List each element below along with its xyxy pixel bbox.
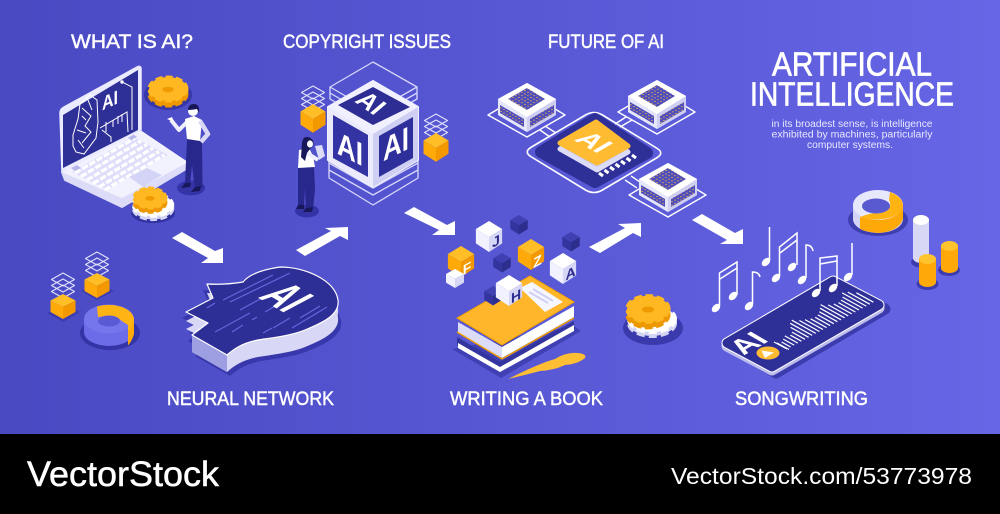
- server: right: [629, 163, 706, 217]
- phone screen: [727, 281, 879, 367]
- heading: songwriting: SONGWRITING: [735, 388, 868, 410]
- heading: writing a book: WRITING A BOOK: [450, 388, 603, 410]
- phone shadow: [731, 285, 885, 373]
- letter cube: F: [448, 246, 474, 279]
- letter cube: F: F: [463, 259, 471, 279]
- phone side: [727, 284, 879, 370]
- note group 1: [710, 262, 739, 314]
- note group 4: [770, 233, 798, 284]
- server: top right: [618, 80, 695, 134]
- footer bar: VectorStock: [27, 455, 220, 494]
- connectors: [540, 117, 643, 188]
- book label: [520, 282, 563, 312]
- music notes: [710, 227, 854, 314]
- description text: exhibited by machines, particularly: [772, 130, 932, 140]
- letter cube: J: J: [492, 232, 500, 252]
- donut chart: right: [848, 190, 908, 236]
- small stack: left: [300, 86, 326, 133]
- screen brain circuit: [73, 81, 132, 154]
- letter cube: H: [496, 275, 522, 308]
- letter cube: A: [550, 253, 576, 285]
- laptop screen: [60, 66, 141, 172]
- description text: in its broadest sense, is intelligence: [772, 119, 933, 130]
- book scene: [446, 215, 585, 379]
- book cover: [457, 276, 574, 345]
- head shadow: [182, 273, 334, 361]
- lavender cylinder: [911, 215, 931, 268]
- title: artificial intelligence: INTELLIGENCE: [750, 76, 954, 112]
- head top face: [186, 267, 338, 355]
- footer bar: VectorStock.com/53773978: [671, 463, 972, 489]
- cube wireframe layers: [329, 62, 418, 205]
- title: artificial intelligence: ARTIFICIAL: [772, 46, 932, 82]
- letter cube: Z: [518, 239, 544, 272]
- letter cube: Z: Z: [533, 252, 542, 272]
- phone: AI: [722, 328, 776, 359]
- chip outer outline: [527, 112, 661, 192]
- note 3: [760, 227, 772, 268]
- letter cube: H: H: [511, 286, 521, 308]
- neural network head: [182, 267, 341, 376]
- lower book: [457, 321, 574, 370]
- heading: what is AI: WHAT IS AI?: [71, 31, 193, 53]
- AI cube: AI: [383, 119, 409, 169]
- arrow: copyright to book: [404, 207, 455, 235]
- AI chip and servers: AI: [568, 127, 619, 157]
- arrow: neural network to copyright: [296, 227, 348, 256]
- book shadow: [452, 326, 581, 378]
- chip body: [560, 128, 628, 170]
- letter cube: A: A: [565, 263, 576, 285]
- description text: [772, 119, 933, 151]
- donut chart: left: [80, 304, 140, 350]
- title: artificial intelligence: [750, 46, 954, 112]
- play button: [756, 346, 780, 360]
- left stacks and donut: [47, 252, 140, 350]
- AI cube: AI: [349, 87, 392, 120]
- description text: computer systems.: [807, 140, 893, 151]
- heading: copyright issues: COPYRIGHT ISSUES: [283, 31, 451, 53]
- quill feather: [508, 353, 585, 379]
- orange cylinder: front: [916, 254, 938, 290]
- chip plate: [541, 119, 647, 182]
- gear: top: [144, 77, 192, 110]
- cylinders: [911, 215, 960, 290]
- heading: neural network: NEURAL NETWORK: [167, 388, 334, 410]
- cube body: [328, 81, 418, 187]
- note 2: [743, 272, 760, 312]
- arrow: book to future: [589, 223, 641, 253]
- woman figure: [295, 137, 325, 218]
- footer bar: [0, 434, 1000, 514]
- man figure: [167, 104, 208, 196]
- neural network head: AI: [248, 276, 325, 318]
- dark cubes: [484, 215, 580, 306]
- laptop: [60, 66, 186, 207]
- AI cube: AI: [337, 124, 363, 174]
- note 5: [796, 245, 813, 286]
- small white cube: [446, 269, 464, 288]
- gear: bottom: [131, 188, 175, 223]
- head streaks: [207, 273, 327, 333]
- cube stack: upper: [81, 252, 114, 300]
- small stack: right: [424, 114, 448, 162]
- upper book pages: [458, 322, 502, 358]
- phone: [722, 281, 885, 373]
- waveform: [774, 292, 873, 350]
- cube stack: lower: [47, 273, 80, 322]
- note 7: [842, 243, 854, 283]
- AI cube: [328, 62, 418, 205]
- arrow: future to songwriting: [692, 214, 743, 244]
- head extrusion: [186, 284, 338, 372]
- arrow: laptop to neural network: [172, 232, 223, 263]
- AI chip and servers: [488, 80, 706, 217]
- letter cube: J: [476, 221, 502, 252]
- gear: right: [623, 296, 683, 345]
- note group 6: [810, 256, 839, 299]
- orange cylinder: back: [938, 241, 960, 276]
- server: top left: [488, 83, 565, 137]
- laptop base: [62, 132, 186, 207]
- heading: future of AI: FUTURE OF AI: [548, 31, 664, 53]
- laptop: AI: [102, 86, 118, 115]
